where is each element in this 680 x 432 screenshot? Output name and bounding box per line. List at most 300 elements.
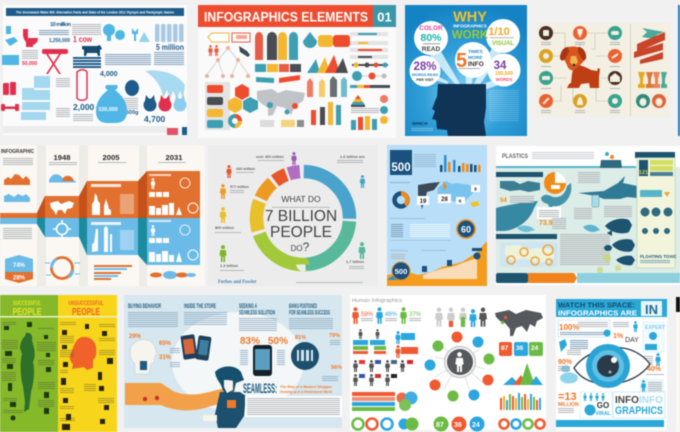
info graphics box: INFO bbox=[615, 395, 639, 406]
circular icons bbox=[539, 26, 622, 108]
fish school bbox=[500, 181, 540, 192]
yellow-green splashes bbox=[597, 254, 621, 273]
500 medallion: 500 bbox=[395, 267, 407, 276]
right column: 121 bbox=[639, 170, 648, 176]
centre title: PEOPLE bbox=[270, 224, 332, 241]
orange stat and copy: 73.9 bbox=[539, 220, 553, 227]
title banner: INFOGRAPHICS ELEMENTS bbox=[204, 10, 368, 26]
bubble: colour 80%: 80% bbox=[420, 32, 442, 44]
bubble: 5 times more info: INFO bbox=[468, 61, 484, 68]
stat tiles: 24 bbox=[531, 345, 539, 352]
go viral box: GO bbox=[597, 401, 609, 410]
orange percent figures bbox=[129, 333, 342, 371]
column headings: INSIDE THE STORE bbox=[184, 303, 216, 310]
heading: unsuccessful: UNSUCCESSFUL bbox=[68, 300, 104, 307]
dumbbell icon bbox=[1, 104, 19, 111]
donut bbox=[394, 194, 408, 206]
bottom stat circles: 24 bbox=[472, 422, 480, 429]
100% stat: 100% bbox=[559, 323, 579, 332]
expert box: EXPERT bbox=[645, 325, 665, 331]
13 million stat: MILLION bbox=[558, 402, 579, 408]
headline figures: 4,000 bbox=[100, 71, 118, 78]
orange tube bbox=[125, 383, 235, 410]
headline figures: 4,700 bbox=[144, 114, 166, 124]
top stat figures: 37% bbox=[409, 312, 422, 318]
figure: agriculture: 1.4 billion bbox=[220, 263, 239, 268]
header band: INFOGRAPHICS ARE bbox=[558, 308, 637, 318]
90% stat: 90% bbox=[558, 359, 573, 366]
headline figures: 50,000 bbox=[22, 61, 38, 67]
seamless title: The Rise of a Modern Shopper bbox=[280, 384, 332, 389]
orange pie bbox=[544, 172, 566, 194]
navy 500 badge: 500 bbox=[391, 162, 411, 174]
panel: Successful vs Unsuccessful people bbox=[0, 295, 117, 432]
red bottles icons bbox=[3, 82, 16, 95]
heading: INFOGRAPHIC bbox=[1, 149, 34, 155]
vertical divider bbox=[630, 24, 631, 116]
top figure and label bbox=[256, 152, 297, 165]
footer bar bbox=[556, 420, 664, 427]
head silhouette bbox=[130, 339, 157, 374]
bubble: 28% words read: PER VISIT bbox=[416, 78, 434, 82]
world map bbox=[495, 310, 543, 336]
water trees icons bbox=[103, 24, 150, 42]
13 million stat: =13 bbox=[558, 391, 577, 403]
fish navy bbox=[604, 219, 635, 265]
grey strip of tags bbox=[205, 82, 230, 130]
boat bbox=[600, 152, 622, 168]
bubble: 1/10 visual: VISUAL bbox=[492, 41, 514, 47]
figures: greyscale row bbox=[435, 308, 487, 327]
navy fist icon bbox=[125, 80, 139, 96]
icon glyphs bbox=[542, 29, 620, 105]
blobs bottom bbox=[398, 418, 418, 430]
bottom stat circles: 36 bbox=[454, 422, 462, 429]
organisation tree bbox=[206, 48, 249, 76]
copy column bbox=[560, 172, 632, 266]
info graphics box: INFO bbox=[639, 395, 663, 406]
74% hex badge bbox=[5, 255, 33, 272]
bubble: 28% words read: 28% bbox=[413, 61, 437, 73]
panel: Seamless banking infographic: FOR SEAMLESS SUCCESS bbox=[289, 310, 330, 316]
white bar charts 2005 bbox=[91, 184, 134, 252]
wave chart bbox=[150, 271, 196, 279]
green captions bbox=[2, 321, 56, 413]
40% stat: 40% bbox=[647, 366, 662, 373]
60 badge bbox=[457, 220, 475, 238]
blue wave bbox=[387, 274, 406, 280]
map pins bbox=[267, 102, 298, 114]
map labels: 19 bbox=[420, 199, 427, 205]
ribbons bbox=[256, 75, 300, 83]
wave line bbox=[496, 166, 636, 168]
bottom rings bbox=[500, 420, 544, 428]
13 million stat bbox=[558, 391, 579, 413]
people grid bbox=[352, 392, 395, 411]
centre title bbox=[265, 194, 337, 254]
tag labels bbox=[208, 33, 250, 42]
figure: overweight bbox=[226, 165, 256, 178]
headline figures: 1,250,000 bbox=[49, 38, 70, 44]
hexagons bbox=[228, 84, 258, 113]
28% badge bbox=[5, 272, 33, 283]
centre hub bbox=[435, 343, 485, 392]
seamless title: Growing up in a Omnichannel World bbox=[280, 389, 332, 394]
bubble: colour 80%: COLOR bbox=[419, 25, 443, 32]
go viral box: VIRAL bbox=[596, 411, 610, 417]
map highlights bbox=[501, 316, 507, 324]
panel: dog infographic bbox=[536, 23, 670, 117]
figure: elderly: 577 million bbox=[230, 185, 250, 189]
footer band and logos bbox=[3, 126, 187, 135]
world map bbox=[418, 181, 480, 209]
heading: WORK bbox=[452, 30, 489, 42]
side circles bbox=[380, 95, 388, 124]
bubble: 34 / 100,500 words bbox=[488, 54, 520, 86]
donut chart bbox=[45, 258, 80, 278]
list rows bbox=[390, 218, 451, 242]
panel: Why Infographics Work bbox=[405, 5, 527, 136]
section heading 2 bbox=[496, 234, 557, 239]
gender rows bbox=[395, 331, 418, 358]
whale bbox=[496, 201, 538, 231]
28% badge: 28% bbox=[13, 276, 26, 282]
500 medallion bbox=[392, 262, 410, 280]
number badge bbox=[373, 5, 396, 27]
orange stat and copy: 54 bbox=[500, 198, 507, 204]
right column: FLOATING TOXIC bbox=[640, 254, 677, 259]
info graphics box bbox=[613, 392, 665, 418]
panel: Human Infographics bbox=[350, 295, 546, 432]
small captions bbox=[170, 340, 340, 381]
striped blocks bbox=[73, 57, 101, 68]
world map bbox=[257, 89, 305, 116]
label rows bbox=[260, 120, 304, 127]
body copy blocks bbox=[22, 23, 184, 121]
donut bbox=[230, 116, 240, 126]
orange percent figures: 81% bbox=[295, 335, 306, 341]
figure: overweight: 430 million bbox=[236, 167, 256, 171]
heading: PLASTICS bbox=[502, 153, 528, 160]
title banner bbox=[198, 5, 373, 27]
top figure and label: over 400 million bbox=[256, 155, 285, 159]
copy blocks bbox=[128, 311, 333, 332]
connector lines bbox=[553, 33, 608, 101]
flag row one bbox=[353, 360, 413, 372]
heading: Human Infographics bbox=[352, 298, 402, 304]
orange percent figures: 65% bbox=[159, 341, 172, 347]
side icons bbox=[559, 339, 570, 372]
people pair bbox=[208, 45, 219, 56]
orange percent figures: 50% bbox=[268, 336, 288, 347]
info graphics box: GRAPHICS bbox=[615, 405, 663, 417]
intro lines bbox=[532, 152, 594, 160]
bubble: 34 / 100,500 words: 100,500 bbox=[495, 71, 513, 77]
chart copy bbox=[390, 154, 436, 184]
ironing board icon bbox=[42, 49, 68, 74]
stacked bars bbox=[351, 116, 377, 130]
bubble: 34 / 100,500 words: WORDS bbox=[496, 77, 512, 82]
white divider bbox=[0, 316, 117, 318]
centre title: DO? bbox=[291, 240, 310, 254]
money bag with 330,000 bbox=[96, 85, 127, 123]
panel: Fortune 500 style blue infographic bbox=[387, 145, 487, 286]
column headings: SEAMLESS SOLUTION bbox=[239, 310, 275, 316]
dog bbox=[560, 46, 600, 88]
supporting copy bbox=[489, 90, 519, 122]
map labels: 28 bbox=[441, 197, 448, 203]
coloured rule bbox=[350, 85, 390, 88]
bubble: colour 80% bbox=[414, 21, 448, 55]
figure: work: 1.7 billion bbox=[346, 259, 365, 264]
trophy row bbox=[638, 72, 667, 88]
pyramid bbox=[351, 95, 365, 107]
small fish bbox=[517, 226, 535, 232]
swim shapes bbox=[2, 26, 19, 65]
orange percent figures: 79% bbox=[329, 333, 340, 339]
panel: Infographics Elements 01 bbox=[198, 5, 396, 138]
world map bbox=[50, 201, 74, 215]
donut ring bbox=[256, 172, 350, 264]
publisher logo: Forbes and Fowler bbox=[218, 280, 258, 285]
panel: Watch This Space bbox=[556, 299, 667, 430]
year labels: 2031 bbox=[166, 153, 183, 162]
headline figures: 600g bbox=[126, 110, 139, 116]
tree nodes bbox=[205, 46, 250, 78]
1% per day stat: 1% bbox=[613, 333, 624, 340]
toilet icon bbox=[23, 29, 38, 47]
tall rounded tabs bbox=[255, 32, 298, 60]
panel: Plastics infographic bbox=[496, 146, 680, 285]
bubble: 5 times more info bbox=[455, 42, 491, 78]
heading bar: The Greenwash Water Bill: Alternative Facts and Stats of the London 2012 Olympic and Paralympic Games bbox=[16, 11, 174, 15]
year captions bbox=[3, 157, 186, 166]
brain icon bbox=[560, 372, 578, 384]
heading: successful: SUCCESSFUL bbox=[13, 300, 41, 307]
year labels: 1948 bbox=[54, 153, 70, 162]
small light fish bbox=[583, 225, 600, 232]
plastic jar bbox=[592, 195, 599, 207]
ribbons bbox=[634, 28, 665, 64]
chart markers bbox=[422, 248, 482, 272]
people tile bbox=[640, 379, 664, 394]
number badge: 01 bbox=[377, 10, 392, 24]
year labels: 2005 bbox=[103, 153, 120, 162]
column headings bbox=[128, 303, 330, 316]
heading bbox=[452, 10, 489, 42]
centre title: 7 BILLION bbox=[265, 208, 337, 225]
column chart bbox=[440, 155, 480, 172]
multi colour bars bbox=[500, 393, 541, 410]
green bottom icon bbox=[10, 416, 16, 420]
water bottles row bbox=[155, 24, 184, 42]
map labels bbox=[417, 185, 480, 205]
centre title: WHAT DO bbox=[281, 194, 321, 204]
orange percent figures: 29% bbox=[129, 334, 142, 340]
heading: WHY bbox=[453, 10, 487, 26]
cow icon bbox=[82, 45, 102, 56]
right column bbox=[635, 152, 677, 268]
lock icon bbox=[140, 361, 147, 370]
ring icon bbox=[53, 220, 71, 239]
swordfish bbox=[578, 176, 637, 199]
stat tiles: 87 bbox=[501, 345, 509, 352]
blue staircase bbox=[0, 218, 200, 265]
caption lines bbox=[541, 42, 620, 113]
bubble: 5 times more info: MORE bbox=[468, 55, 483, 61]
top stat figures: 46% bbox=[385, 312, 398, 318]
seamless title: SEAMLESS: bbox=[243, 381, 277, 396]
year labels bbox=[54, 153, 183, 162]
bubble: 5 times more info: 5 bbox=[456, 50, 467, 72]
figure: babies: 1.6 billion are bbox=[340, 154, 366, 159]
1% per day stat: DAY bbox=[625, 337, 639, 344]
source line bbox=[296, 281, 363, 283]
header band: WATCH THIS SPACE: bbox=[558, 300, 635, 310]
heading: successful bbox=[12, 300, 42, 318]
bottom stat circles bbox=[434, 416, 484, 432]
hierarchy figures bbox=[353, 329, 386, 354]
headline figures: 5 million bbox=[156, 42, 184, 52]
globe bbox=[172, 312, 304, 412]
peak chart bbox=[503, 363, 543, 385]
copy lines bbox=[390, 249, 446, 259]
map labels: 8 bbox=[474, 186, 477, 192]
panel: What Do 7 Billion People Do? bbox=[208, 145, 377, 286]
green side icons bbox=[4, 322, 51, 414]
orange percent figures: 31% bbox=[159, 355, 172, 361]
1% per day stat bbox=[613, 321, 639, 344]
side copy lines bbox=[567, 339, 661, 366]
left copy bbox=[3, 228, 32, 240]
footer band bbox=[496, 273, 680, 283]
figure: work bbox=[346, 242, 366, 269]
green silhouette bbox=[20, 333, 35, 412]
water rays bbox=[145, 71, 185, 99]
horizontal bars bbox=[94, 265, 132, 280]
speech boxes bbox=[255, 64, 301, 72]
go viral box bbox=[580, 392, 612, 418]
yellow side icons bbox=[61, 324, 113, 430]
bubble: 5 times more info: TIMES bbox=[468, 49, 483, 55]
eye bbox=[574, 344, 650, 388]
black phone bbox=[253, 345, 272, 376]
bubble: 28% words read: WORDS READ bbox=[412, 73, 438, 77]
figure: youth bbox=[215, 207, 241, 233]
medals bbox=[144, 95, 186, 112]
panel: London Olympics water facts infographic bbox=[1, 5, 187, 135]
progress rows bbox=[350, 32, 388, 59]
heading: successful: PEOPLE bbox=[12, 307, 42, 318]
sea background bbox=[496, 167, 680, 273]
money bag with 330,000: 330,000 bbox=[98, 107, 118, 113]
lower label rows bbox=[351, 108, 379, 113]
bubble: 34 / 100,500 words: 34 bbox=[494, 60, 507, 72]
IN badge: IN bbox=[645, 302, 658, 317]
tube markers bbox=[143, 396, 159, 401]
bubble: colour 80%: READ bbox=[422, 46, 441, 53]
flag row two bbox=[353, 374, 397, 386]
navy 500 badge bbox=[390, 150, 412, 175]
headline figures: 2,000 bbox=[73, 102, 95, 112]
74% hex badge: 74% bbox=[13, 263, 26, 269]
area charts bbox=[4, 174, 30, 202]
dog portrait circles bbox=[636, 94, 666, 108]
heading bar bbox=[6, 8, 184, 16]
bubble: 28% words read bbox=[410, 56, 440, 86]
heading: INFOGRAPHICS bbox=[453, 24, 487, 28]
stat tiles: 36 bbox=[516, 345, 524, 352]
figure: elderly bbox=[220, 184, 250, 199]
orange stat and copy bbox=[500, 196, 566, 230]
orange silhouette bbox=[70, 337, 96, 370]
orange percent figures: 83% bbox=[240, 336, 260, 347]
hub nodes bbox=[424, 332, 494, 402]
panel: Seamless banking infographic bbox=[124, 295, 342, 428]
bubble: 1/10 visual: 1/10 bbox=[488, 26, 510, 38]
orange staircase bbox=[0, 171, 200, 218]
columns chart bbox=[311, 102, 341, 125]
venn diagram bbox=[396, 392, 418, 411]
header band bbox=[556, 299, 667, 318]
red loop ribbon bbox=[77, 70, 87, 100]
yellow captions bbox=[60, 321, 115, 421]
heading: unsuccessful: PEOPLE bbox=[72, 307, 100, 318]
panel: orange and blue timeline infographic bbox=[0, 145, 205, 286]
chain nodes bbox=[352, 62, 388, 81]
navy sphere bbox=[291, 342, 319, 370]
building bars bbox=[307, 76, 347, 97]
triangle peaks bbox=[307, 55, 348, 73]
right edge sliver bbox=[678, 5, 680, 136]
column headings: BUYING BEHAVIOR bbox=[128, 303, 161, 310]
figure: babies bbox=[337, 154, 366, 188]
bottom stat circles: 87 bbox=[436, 422, 444, 429]
stat tiles bbox=[499, 342, 543, 356]
woman with phone bbox=[203, 366, 246, 428]
section heading 1 bbox=[496, 172, 543, 177]
white charts 2031 bbox=[149, 174, 198, 262]
top stat figures: 58% bbox=[361, 312, 374, 318]
text box bbox=[245, 396, 342, 417]
rings bottom left bbox=[352, 418, 392, 430]
figure: youth: 800 million bbox=[215, 226, 235, 230]
60 badge: 60 bbox=[461, 224, 471, 234]
hill chart bbox=[49, 174, 76, 182]
neighbouring panel sliver bbox=[676, 297, 680, 432]
light blue grid bbox=[21, 76, 50, 120]
seal bbox=[541, 183, 571, 210]
headline figures bbox=[22, 22, 184, 124]
ocean gyres map bbox=[500, 242, 558, 267]
bubble: 1/10 visual bbox=[486, 19, 520, 53]
head silhouette bbox=[432, 84, 486, 136]
logo: WHICH bbox=[412, 121, 428, 126]
headline figures: 10 million bbox=[50, 22, 72, 28]
column headings: BANKS POSITIONED bbox=[289, 303, 317, 310]
key icon bbox=[239, 46, 250, 57]
grey column bands bbox=[37, 145, 147, 286]
headline figures: 1 cow bbox=[73, 35, 93, 44]
drop callouts bbox=[303, 32, 350, 48]
orange area chart bbox=[387, 241, 487, 286]
heading: unsuccessful bbox=[68, 300, 104, 318]
top stat figures bbox=[352, 307, 422, 324]
phones bbox=[180, 334, 212, 361]
light rays bbox=[423, 44, 507, 90]
orange percent figures: 56% bbox=[331, 365, 342, 371]
map labels: 6 bbox=[459, 198, 462, 204]
